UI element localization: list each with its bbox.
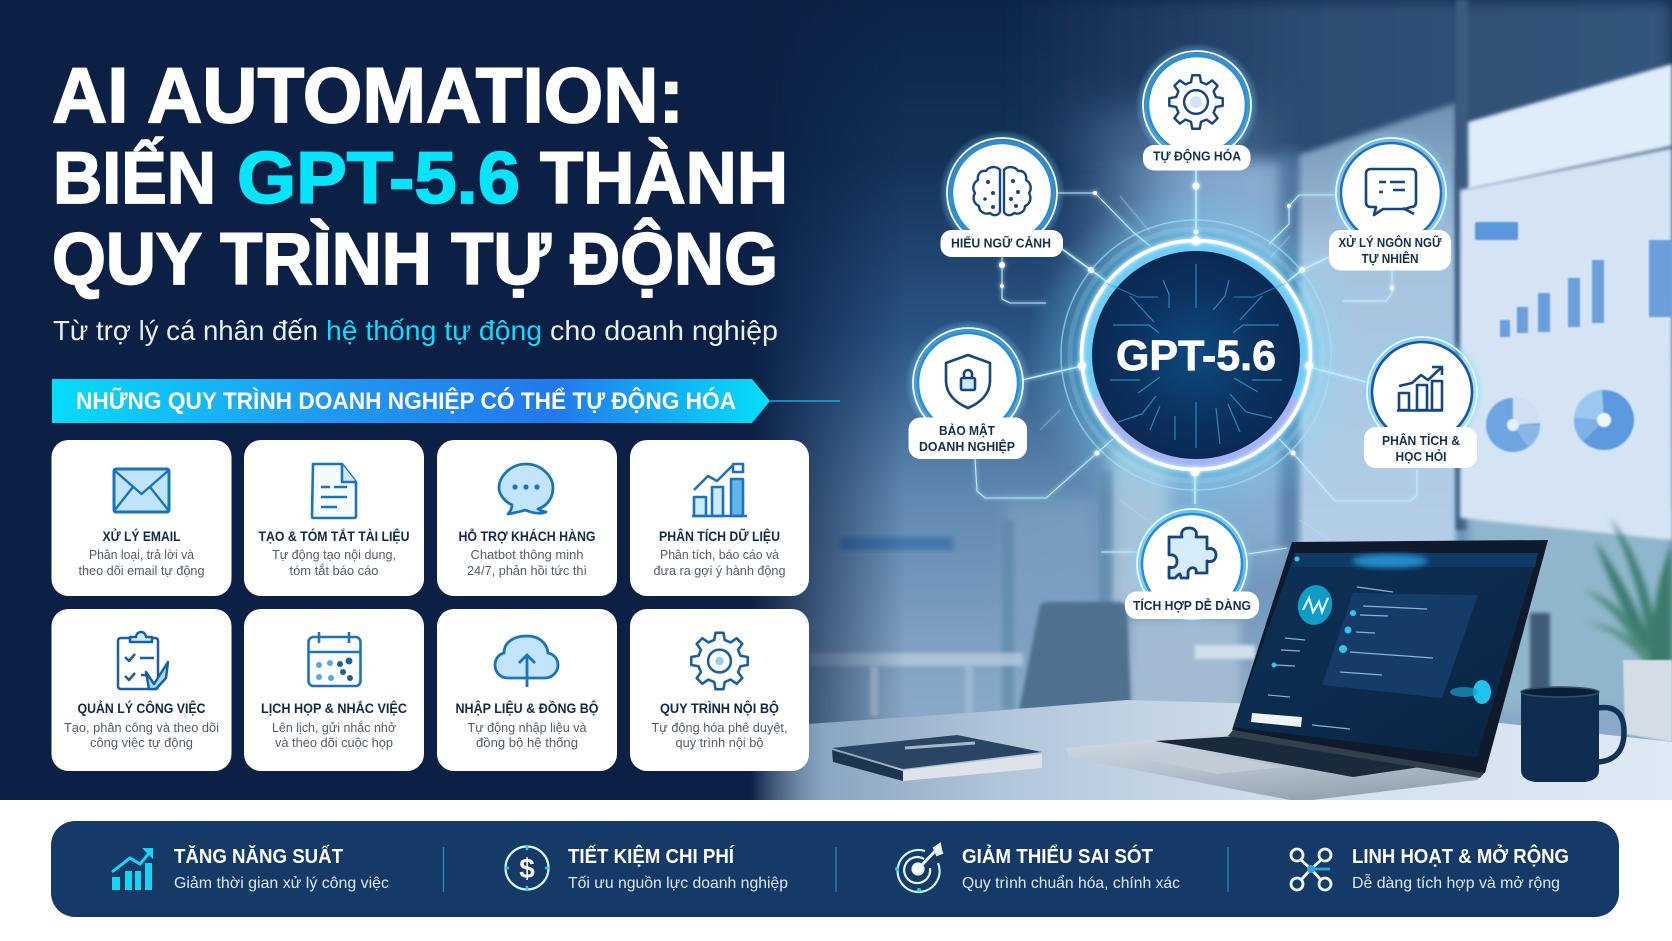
node: tự động hóa: TỰ ĐỘNG HÓA <box>1153 148 1242 164</box>
card: quy trình nội bộ <box>630 609 809 771</box>
node: tự động hóa <box>1135 43 1259 170</box>
card: lịch họp và nhắc việc: và theo dõi cuộc họp <box>275 736 393 750</box>
card: tạo và tóm tắt tài liệu <box>244 440 424 596</box>
card: hỗ trợ khách hàng: HỖ TRỢ KHÁCH HÀNG <box>458 529 596 544</box>
card: quy trình nội bộ: Tự động hóa phê duyệt, <box>652 721 788 735</box>
icon: target <box>895 844 942 892</box>
benefit: linh hoạt và mở rộng <box>1291 844 1569 892</box>
laptop <box>1067 540 1548 800</box>
desk <box>750 700 1672 800</box>
connectors <box>975 170 1417 554</box>
title <box>52 51 788 300</box>
GPT-5.6 hub: GPT-5.6 <box>1116 332 1276 380</box>
card: nhập liệu và đồng bộ: Tự động nhập liệu và <box>468 721 587 735</box>
benefit: giảm thiểu sai sót: Quy trình chuẩn hóa, chính xác <box>962 874 1180 892</box>
chairs <box>1019 602 1550 729</box>
title: GPT-5.6 <box>237 138 520 219</box>
card: tạo và tóm tắt tài liệu: Tự động tạo nội dung, <box>272 548 396 562</box>
title: QUY TRÌNH TỰ ĐỘNG <box>52 219 778 300</box>
icon: brain <box>973 167 1031 215</box>
circuit traces <box>1106 264 1286 448</box>
icon: document <box>312 464 356 518</box>
card: hỗ trợ khách hàng: Chatbot thông minh <box>470 548 584 562</box>
card: hỗ trợ khách hàng: 24/7, phản hồi tức thì <box>467 564 587 578</box>
title: THÀNH <box>540 138 788 219</box>
card: phân tích dữ liệu: đưa ra gợi ý hành động <box>654 564 786 578</box>
icon: speech bubble <box>1366 169 1416 215</box>
benefit: linh hoạt và mở rộng: LINH HOẠT & MỞ RỘNG <box>1352 844 1569 868</box>
icon: network <box>1291 849 1331 890</box>
node: phân tích và học hỏi: HỌC HỎI <box>1396 449 1446 464</box>
card: quản lý công việc: QUẢN LÝ CÔNG VIỆC <box>78 701 206 716</box>
subtitle: cho doanh nghiệp <box>550 315 778 346</box>
benefits bar <box>51 821 1619 917</box>
icon: gear <box>691 633 748 689</box>
card: xử lý email <box>52 440 232 596</box>
benefit: linh hoạt và mở rộng: Dễ dàng tích hợp và mở rộng <box>1352 873 1560 892</box>
notebook <box>832 735 1042 781</box>
benefit: giảm thiểu sai sót <box>895 844 1180 892</box>
icon: shield <box>946 355 990 408</box>
GPT-5.6 hub <box>1061 220 1331 490</box>
icon: cloud upload <box>495 636 558 687</box>
benefit: tiết kiệm chi phí: TIẾT KIỆM CHI PHÍ <box>568 844 734 868</box>
section banner <box>52 379 840 423</box>
card: phân tích dữ liệu: Phân tích, báo cáo và <box>660 548 779 562</box>
icon: bar chart <box>692 464 747 516</box>
benefit: tăng năng suất: Giảm thời gian xử lý công việc <box>174 875 389 892</box>
title: AI AUTOMATION: <box>52 51 684 139</box>
icon: email <box>114 469 169 512</box>
subtitle: hệ thống tự động <box>326 315 542 346</box>
card: quản lý công việc: công việc tự động <box>90 736 193 750</box>
hub glow <box>1026 185 1366 525</box>
icon: clipboard <box>118 632 168 689</box>
card: nhập liệu và đồng bộ: NHẬP LIỆU & ĐỒNG BỘ <box>456 701 598 716</box>
card: quản lý công việc <box>52 609 232 771</box>
card: quy trình nội bộ: QUY TRÌNH NỘI BỘ <box>660 701 779 716</box>
benefit: tiết kiệm chi phí: Tối ưu nguồn lực doanh nghiệp <box>568 875 788 892</box>
subtitle: Từ trợ lý cá nhân đến <box>53 315 318 346</box>
node: tích hợp dễ dàng: TÍCH HỢP DỄ DÀNG <box>1133 598 1251 613</box>
title: BIẾN <box>53 138 216 219</box>
icon: gear <box>1169 75 1223 129</box>
subtitle <box>53 315 778 346</box>
card: xử lý email: Phân loại, trả lời và <box>89 548 194 562</box>
node: xử lý ngôn ngữ tự nhiên <box>1328 130 1454 270</box>
wall screen with charts <box>1460 148 1672 540</box>
node: phân tích và học hỏi <box>1359 329 1485 468</box>
icon: rising bars <box>112 848 153 890</box>
node: xử lý ngôn ngữ tự nhiên: TỰ NHIÊN <box>1362 251 1418 266</box>
node: xử lý ngôn ngữ tự nhiên: XỬ LÝ NGÔN NGỮ <box>1338 235 1442 250</box>
benefit: tăng năng suất <box>112 845 389 892</box>
card: phân tích dữ liệu <box>630 440 809 596</box>
card: hỗ trợ khách hàng <box>437 440 617 596</box>
benefit: giảm thiểu sai sót: GIẢM THIỂU SAI SÓT <box>962 844 1153 868</box>
card: lịch họp và nhắc việc: Lên lịch, gửi nhắc nhở <box>272 720 396 735</box>
icon: dollar coin <box>505 845 549 891</box>
coffee mug <box>1521 687 1624 782</box>
card: quy trình nội bộ: quy trình nội bộ <box>676 736 764 750</box>
plant pot <box>1623 660 1672 742</box>
card: xử lý email: XỬ LÝ EMAIL <box>102 529 180 544</box>
icon: growth chart <box>1397 367 1443 410</box>
node: hiểu ngữ cảnh <box>939 130 1065 257</box>
card: nhập liệu và đồng bộ: đồng bộ hệ thống <box>476 736 578 750</box>
icon: dollar coin: $ <box>519 853 535 884</box>
card: quản lý công việc: Tạo, phân công và theo dõi <box>64 721 219 735</box>
plant <box>1584 518 1672 668</box>
node: hiểu ngữ cảnh: HIỂU NGỮ CẢNH <box>951 236 1051 250</box>
icon: puzzle <box>1169 528 1216 578</box>
icon: chat bubble <box>499 464 553 514</box>
benefit: tăng năng suất: TĂNG NĂNG SUẤT <box>174 845 343 868</box>
node: bảo mật doanh nghiệp: DOANH NGHIỆP <box>919 439 1015 454</box>
benefit: tiết kiệm chi phí <box>505 844 788 892</box>
card: phân tích dữ liệu: PHÂN TÍCH DỮ LIỆU <box>659 529 780 544</box>
node: tích hợp dễ dàng <box>1125 501 1259 627</box>
card: tạo và tóm tắt tài liệu: TẠO & TÓM TẮT TÀI LIỆU <box>258 529 410 544</box>
card: tạo và tóm tắt tài liệu: tóm tắt báo cáo <box>290 563 379 578</box>
icon: calendar <box>308 632 360 686</box>
card: xử lý email: theo dõi email tự động <box>78 564 205 578</box>
section banner: NHỮNG QUY TRÌNH DOANH NGHIỆP CÓ THỂ TỰ ĐỘNG HÓA <box>76 387 736 415</box>
node: phân tích và học hỏi: PHÂN TÍCH & <box>1382 433 1460 448</box>
card: lịch họp và nhắc việc <box>244 609 424 771</box>
card: nhập liệu và đồng bộ <box>437 609 617 771</box>
card: lịch họp và nhắc việc: LỊCH HỌP & NHẮC VIỆC <box>261 701 407 716</box>
node: bảo mật doanh nghiệp <box>905 320 1031 459</box>
node: bảo mật doanh nghiệp: BẢO MẬT <box>939 423 995 438</box>
